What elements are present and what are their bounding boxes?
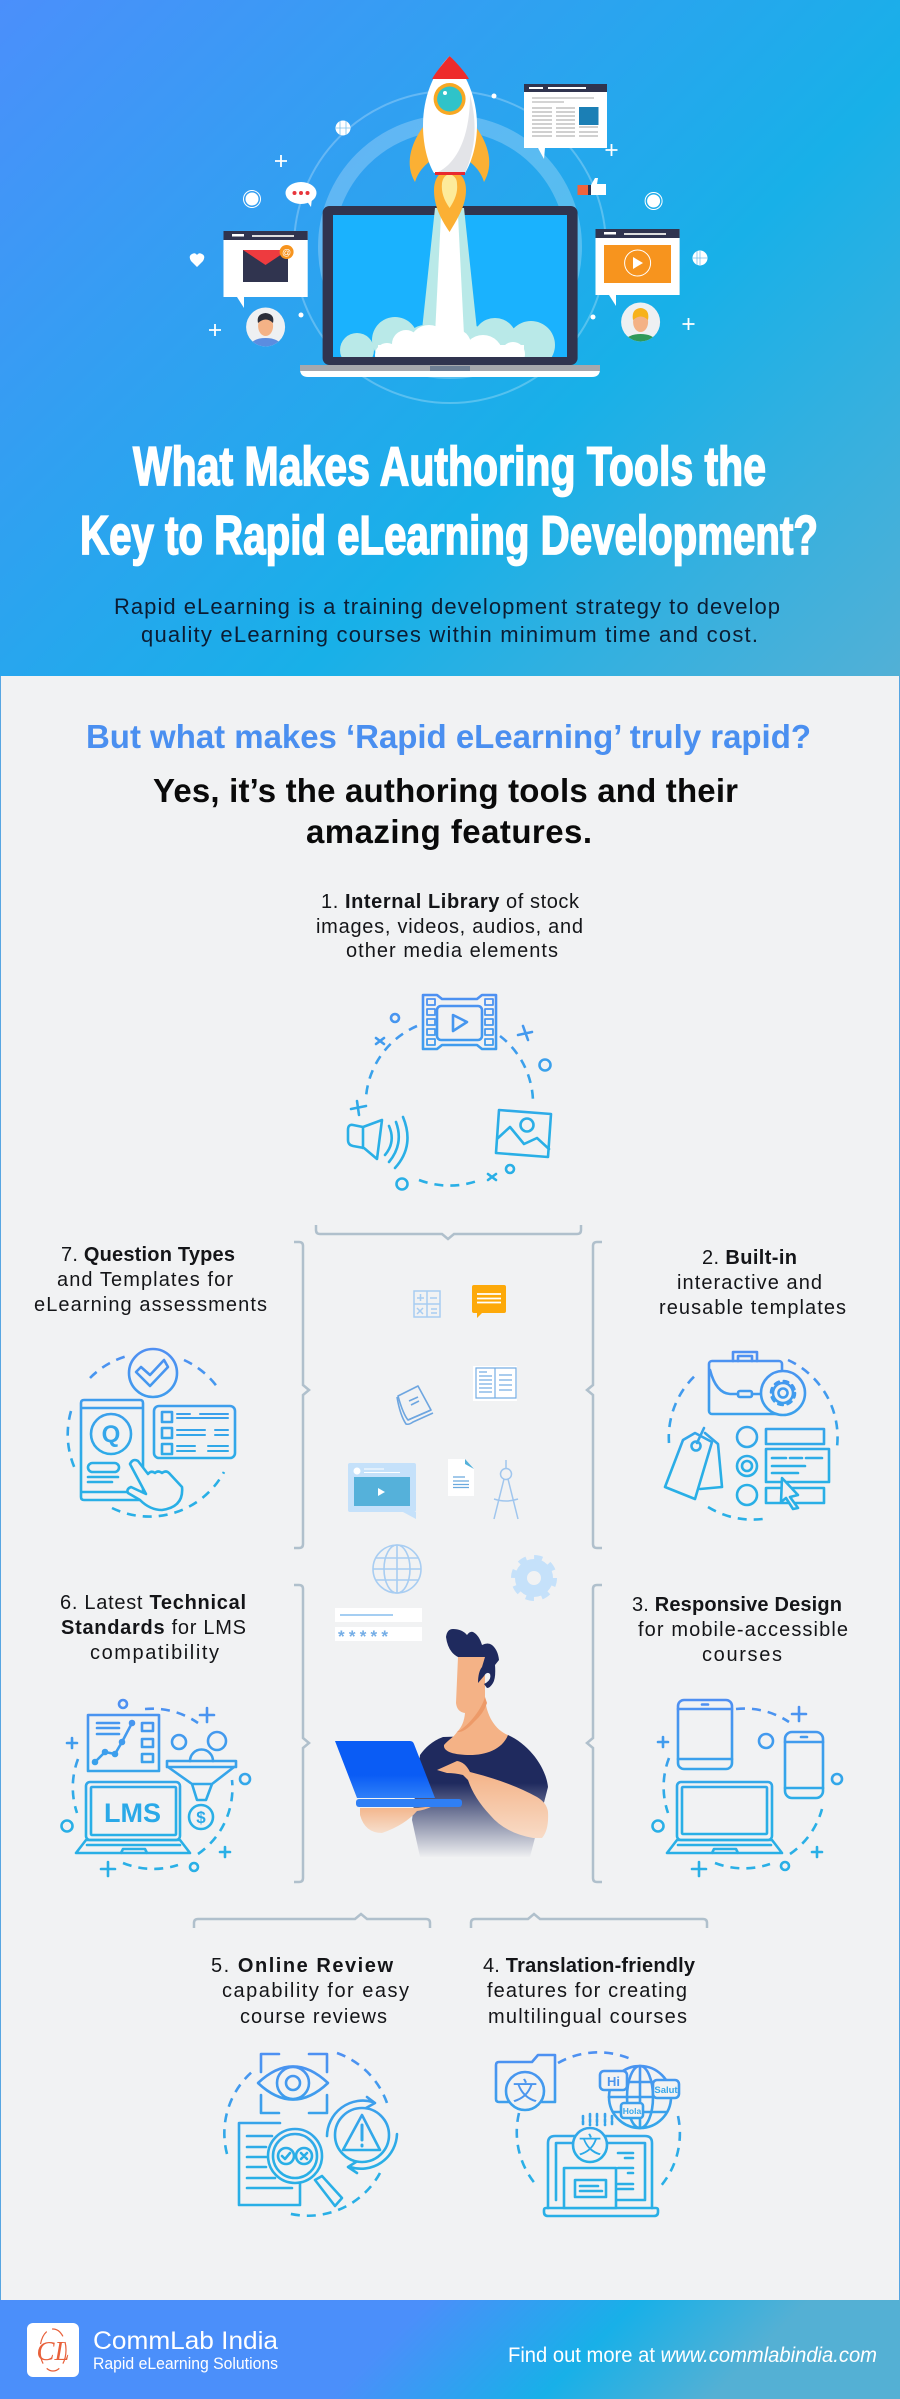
title <box>80 435 818 566</box>
rocket <box>410 56 489 232</box>
feature 2 text: interactive and <box>677 1272 822 1294</box>
feature 3 text: courses <box>702 1644 782 1666</box>
feature 4 text: features for creating <box>487 1980 687 2002</box>
icon: open book <box>473 1366 517 1401</box>
feature 6 text: 6. Latest Technical <box>60 1592 246 1614</box>
feature 7 text <box>34 1244 267 1316</box>
icon: translation: Salut <box>654 2085 678 2096</box>
icon: LMS: LMS <box>104 1798 161 1828</box>
email window: @ <box>282 248 291 258</box>
feature 3 text <box>632 1594 848 1666</box>
feature 5 text: capability for easy <box>222 1980 409 2002</box>
icon: translation: 文 <box>578 2132 602 2158</box>
icon: translation: Hola <box>623 2106 641 2116</box>
feature 4 text <box>483 1955 696 2028</box>
header background <box>0 0 900 690</box>
feature 7 text: and Templates for <box>57 1269 233 1291</box>
bracket: feature 7 <box>294 1242 309 1548</box>
brand name: CommLab India <box>93 2327 278 2355</box>
feature 5 text <box>211 1955 409 2028</box>
feature 6 text: compatibility <box>90 1642 219 1664</box>
icon: translation <box>496 2052 680 2216</box>
icon: question types <box>68 1349 235 1517</box>
bracket: feature 5 <box>194 1914 430 1928</box>
feature 1 text <box>316 891 583 962</box>
feature 7 text: eLearning assessments <box>34 1294 267 1316</box>
hero illustration: rocket launching from laptop <box>190 56 707 403</box>
logo <box>27 2323 79 2377</box>
feature 5 text: course reviews <box>240 2006 387 2028</box>
icon: built-in templates <box>665 1352 838 1520</box>
footer <box>0 2300 900 2399</box>
panel heading: But what makes ‘Rapid eLearning’ truly rapid? <box>86 718 811 755</box>
video window <box>596 229 680 306</box>
subtitle <box>114 594 780 647</box>
news window <box>524 84 607 159</box>
logo: CL <box>36 2336 70 2366</box>
subtitle: Rapid eLearning is a training development strategy to develop <box>114 594 780 619</box>
feature 3 text: 3. Responsive Design <box>632 1594 842 1616</box>
person with laptop <box>335 1629 548 1857</box>
bracket: feature 6 <box>294 1585 309 1882</box>
icon: orange chat <box>472 1285 506 1318</box>
panel subheading: amazing features. <box>306 813 592 850</box>
icon: compass <box>494 1460 518 1519</box>
icon: LMS <box>62 1700 250 1876</box>
avatars <box>246 302 660 350</box>
panel subheading <box>153 772 738 850</box>
icon: LMS: $ <box>196 1808 206 1827</box>
feature 1 text: 1. Internal Library of stock <box>321 891 580 913</box>
brand name <box>93 2327 278 2373</box>
website link text: Find out more at www.commlabindia.com <box>508 2344 877 2367</box>
icon: translation: Hi <box>607 2074 620 2089</box>
feature 2 text: reusable templates <box>659 1297 846 1319</box>
icon: gear <box>514 1558 554 1598</box>
icon: question types: Q <box>102 1421 120 1448</box>
icon: closed book <box>397 1386 433 1424</box>
brand name: Rapid eLearning Solutions <box>93 2354 278 2373</box>
login form: ***** <box>338 1627 388 1646</box>
icon: media library <box>348 995 551 1190</box>
feature 2 text <box>659 1247 846 1319</box>
bracket: feature 3 <box>587 1585 602 1882</box>
bracket: feature 4 <box>471 1914 707 1928</box>
icon: globe <box>373 1545 421 1593</box>
email window <box>224 231 308 308</box>
feature 5 text: 5. Online Review <box>211 1955 393 1977</box>
panel subheading: Yes, it’s the authoring tools and their <box>153 772 738 809</box>
subtitle: quality eLearning courses within minimum time and cost. <box>141 622 758 647</box>
bracket: feature 2 <box>587 1242 602 1548</box>
laptop <box>300 206 600 377</box>
main panel <box>0 676 900 2300</box>
login form <box>335 1608 422 1646</box>
floating icons in centre <box>335 1285 554 1646</box>
rocket exhaust and clouds <box>340 208 555 357</box>
small hero icons <box>190 94 707 336</box>
feature 7 text: 7. Question Types <box>61 1244 235 1266</box>
icon: online review <box>224 2053 397 2216</box>
feature 3 text: for mobile-accessible <box>638 1619 848 1641</box>
feature 4 text: 4. Translation-friendly <box>483 1955 696 1977</box>
icon: calculator <box>414 1291 440 1317</box>
icon: document <box>448 1459 474 1496</box>
feature 1 text: other media elements <box>346 940 558 962</box>
feature 1 text: images, videos, audios, and <box>316 916 583 938</box>
bracket: feature 1 <box>316 1225 581 1239</box>
icon: translation: 文 <box>512 2078 538 2106</box>
feature 6 text <box>60 1592 246 1664</box>
icon: video post <box>348 1463 416 1519</box>
feature 4 text: multilingual courses <box>488 2006 687 2028</box>
feature 2 text: 2. Built-in <box>702 1247 797 1269</box>
icon: responsive devices <box>652 1700 842 1876</box>
feature 6 text: Standards for LMS <box>61 1617 246 1639</box>
